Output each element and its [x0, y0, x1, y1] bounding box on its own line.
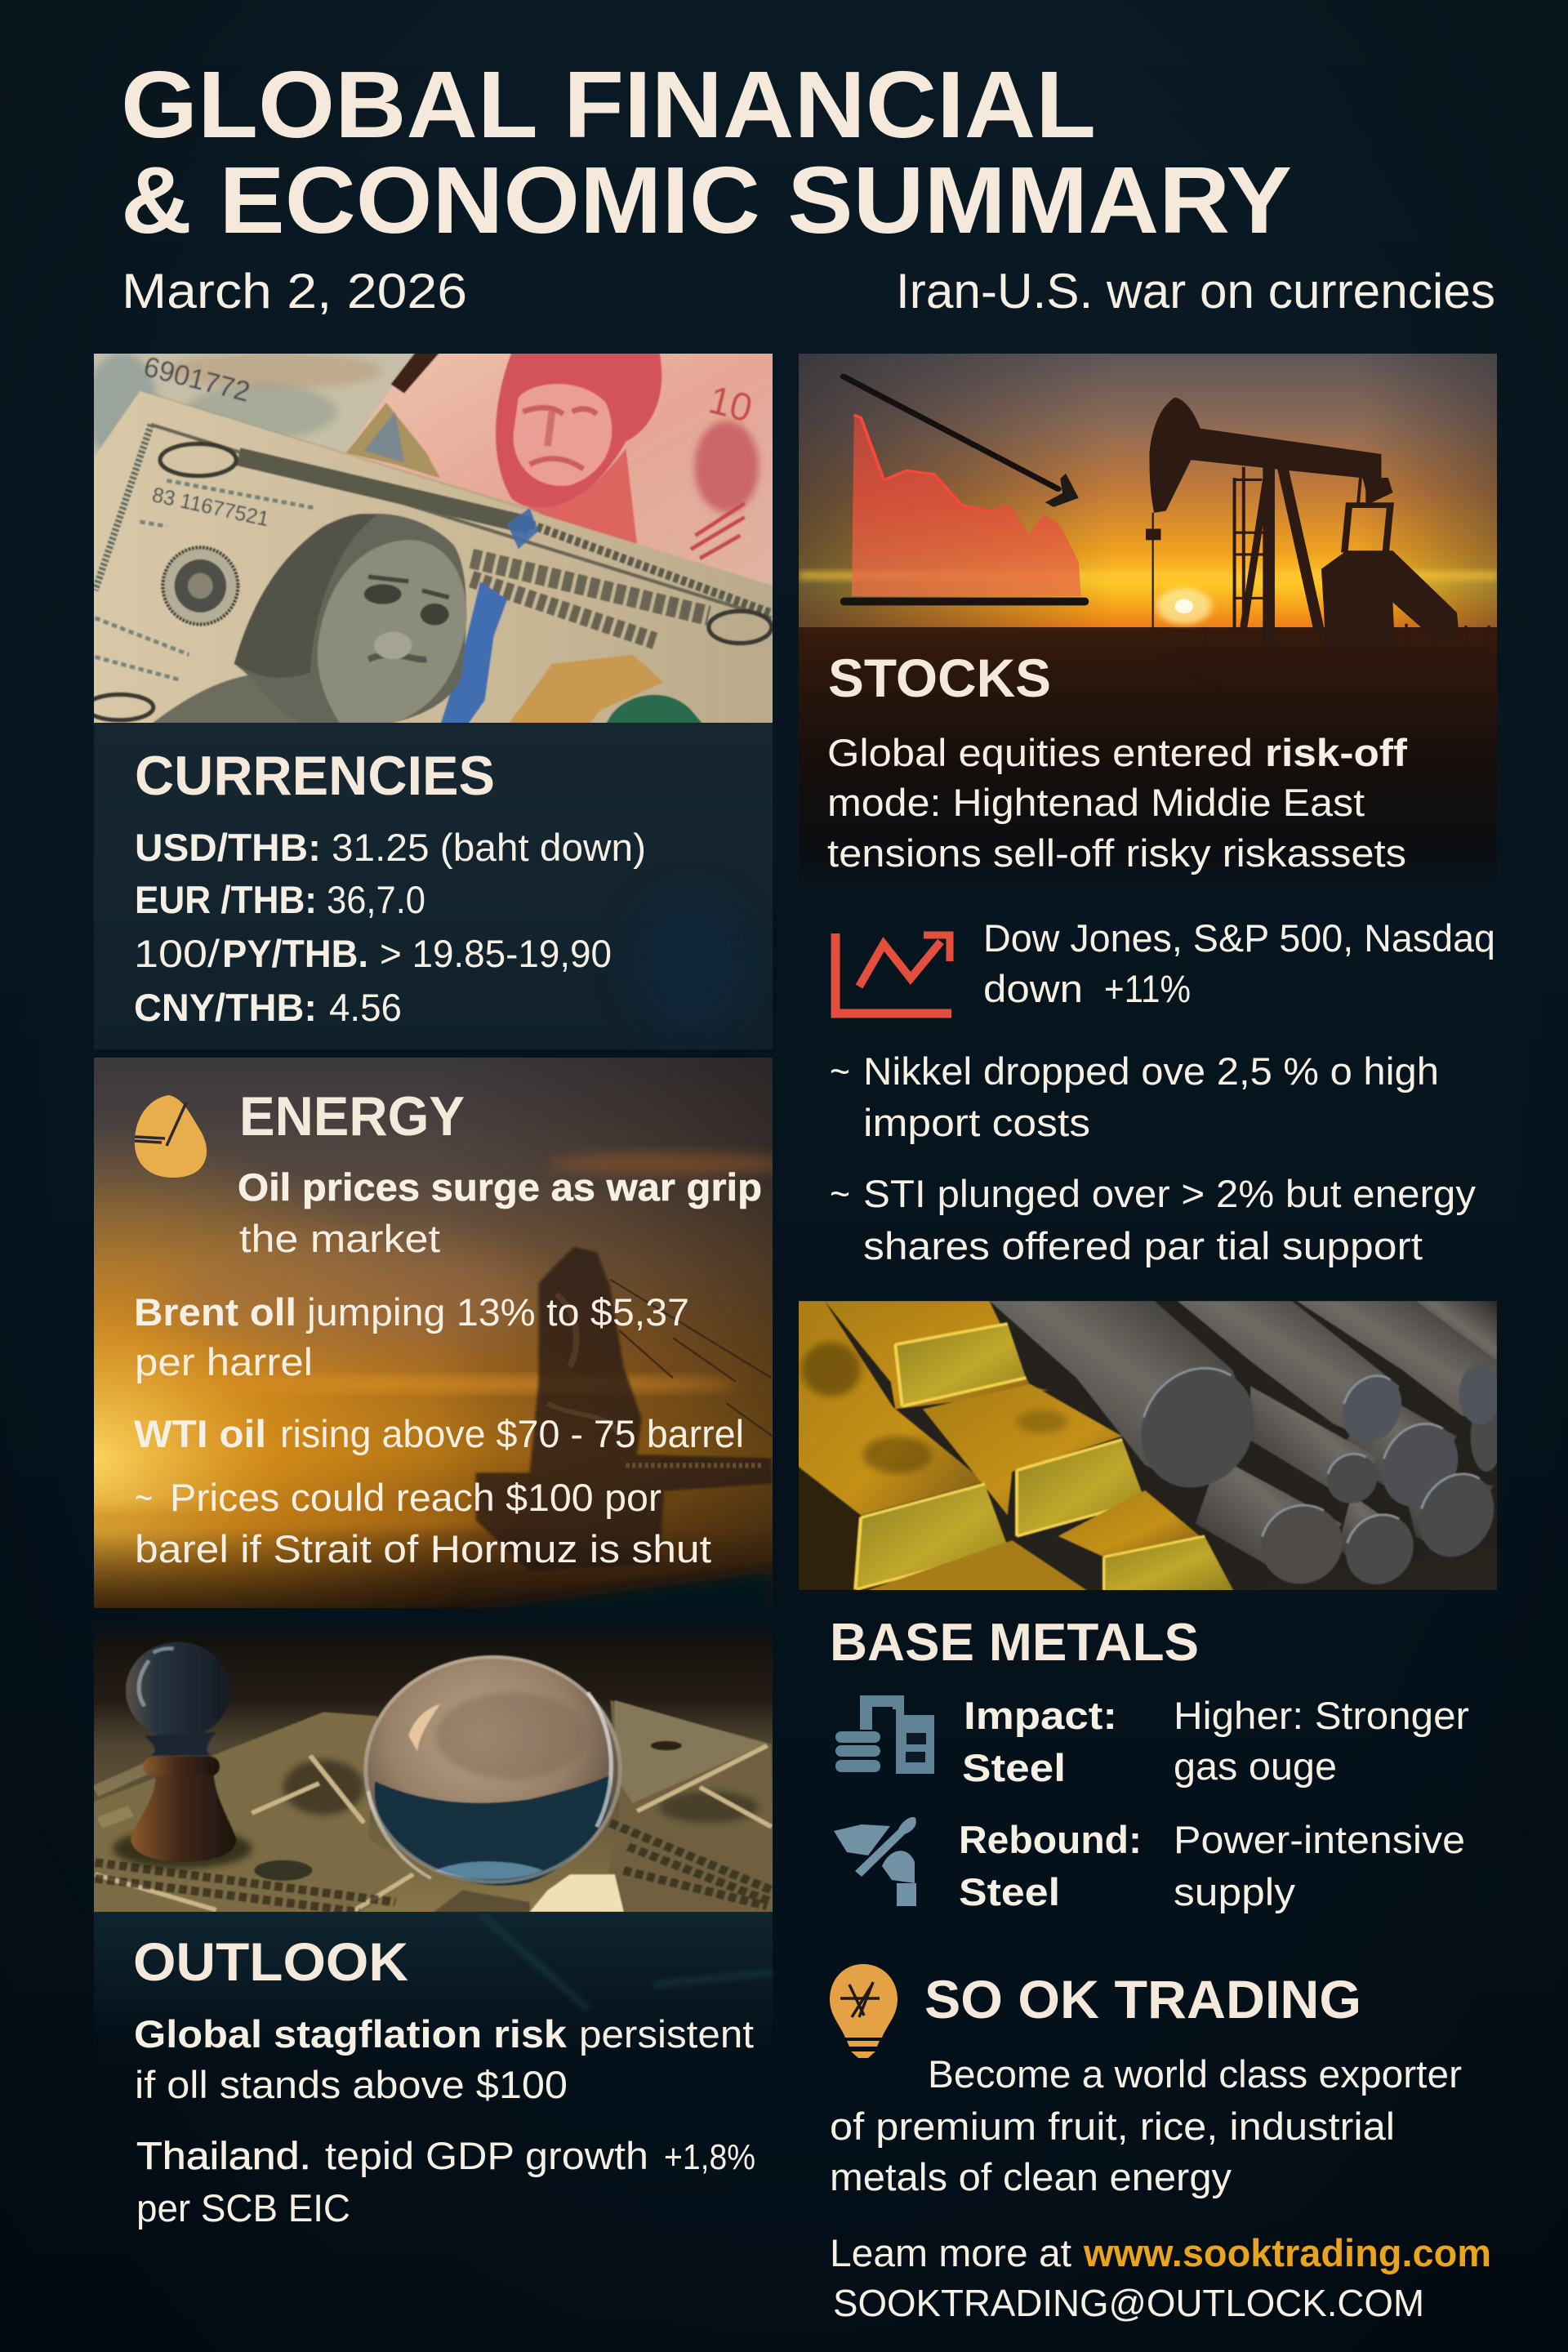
photo: banknotes [86, 351, 776, 726]
photo: pumpjack at sunset with falling chart [799, 354, 1498, 909]
icon: light bulb [830, 1964, 898, 2058]
mission text [830, 2052, 1462, 2198]
rate: CNY [134, 986, 402, 1029]
contact: website: www.sooktrading.com [1083, 2231, 1491, 2274]
heading: currencies: CURRENCIES [135, 745, 495, 807]
rate: CNY: CNY/THB: [134, 986, 317, 1029]
date: March 2, 2026 [122, 264, 467, 318]
photo: crystal ball and pawn [91, 1617, 776, 1914]
summary: oil prices: the market [239, 1217, 440, 1260]
summary: risk-off: mode: Hightenad Middie East [827, 781, 1365, 824]
mission text: of premium fruit, rice, industrial [830, 2105, 1395, 2148]
photo: sunset oil rig [94, 1058, 773, 1608]
contact: website: Leam more at [830, 2231, 1071, 2274]
item: Hormuz: ~ [135, 1476, 153, 1519]
item: impact: Impact: [964, 1694, 1117, 1737]
panel: stocks [799, 354, 1498, 1267]
summary: risk-off: tensions sell-off risky riskassets [827, 831, 1406, 875]
item: Thailand GDP: tepid GDP growth [325, 2134, 648, 2177]
item: Thailand GDP: Thailand. [136, 2134, 311, 2177]
item: Nikkei: Nikkel dropped ove 2,5 % o high [863, 1049, 1439, 1093]
item: brent: jumping 13% to $5,37 [305, 1290, 689, 1334]
rate: USD: USD/THB: [135, 826, 321, 869]
item: brent: Brent oll [134, 1290, 296, 1334]
item: US indexes: Dow Jones, S&P 500, Nasdaq [983, 916, 1495, 960]
photo: gold bars and steel rods [797, 1298, 1506, 1594]
subtitle: Iran-U.S. war on currencies [896, 264, 1495, 318]
photo: banknotes: 6901772 [140, 351, 253, 408]
title: GLOBAL FINANCIAL [121, 51, 1096, 158]
summary: risk-off: Global equities entered [827, 731, 1253, 774]
item: US indexes: down [983, 967, 1083, 1010]
item: stagflation: if oll stands above $100 [135, 2063, 568, 2106]
item: Hormuz [135, 1476, 711, 1570]
heading: outlook: OUTLOOK [133, 1931, 408, 1992]
heading: stocks: STOCKS [828, 648, 1051, 708]
title: & ECONOMIC SUMMARY [121, 147, 1292, 253]
mission text: Become a world class exporter [928, 2052, 1462, 2096]
item: rebound: Power-intensive [1174, 1818, 1465, 1861]
item: rebound: supply [1174, 1870, 1296, 1913]
rate: USD: 31.25 (baht down) [332, 826, 646, 869]
rate: USD [135, 826, 646, 869]
panel: base metals [797, 1298, 1506, 1913]
rate: EUR [135, 878, 425, 921]
item: WTI: WTI oil [134, 1412, 266, 1455]
item: Nikkei [830, 1049, 1439, 1144]
item: Hormuz: Prices could reach $100 por [170, 1476, 662, 1519]
heading: base metals: BASE METALS [830, 1612, 1199, 1672]
item: stagflation: Global stagflation risk [134, 2012, 568, 2056]
item: Thailand GDP: +1,8% [664, 2137, 755, 2177]
contact: website [830, 2231, 1491, 2274]
text panel: currencies [94, 723, 773, 1049]
summary: risk-off: risk-off [1265, 731, 1407, 774]
heading: so ok trading: SO OK TRADING [924, 1969, 1361, 2029]
item: US indexes [983, 916, 1495, 1010]
icon: oil drop [135, 1095, 207, 1178]
panel: so ok trading [830, 1964, 1491, 2324]
item: Nikkei: import costs [863, 1101, 1090, 1144]
rate: CNY: 4.56 [329, 986, 402, 1029]
item: rebound [959, 1818, 1465, 1913]
item: brent [134, 1290, 689, 1383]
summary: risk-off [827, 731, 1407, 875]
item: US indexes: +11% [1104, 967, 1191, 1010]
item: rebound: Rebound: [959, 1818, 1142, 1861]
item: STI: shares offered par tial support [863, 1224, 1423, 1267]
rate: EUR: EUR /THB: [135, 878, 317, 921]
item: brent: per harrel [135, 1340, 313, 1383]
item: stagflation: persistent [579, 2012, 754, 2056]
item: WTI: rising above $70 - 75 barrel [280, 1412, 744, 1455]
icon: tools [834, 1817, 916, 1906]
mission text: metals of clean energy [830, 2155, 1232, 2198]
item: STI [830, 1172, 1477, 1267]
item: stagflation [134, 2012, 754, 2106]
item: impact: Steel [962, 1746, 1066, 1789]
icon: steel coils and plant [835, 1695, 934, 1774]
rate: JPY: > 19.85-19,90 [380, 932, 612, 975]
rate: JPY [134, 932, 612, 975]
item: rebound: Steel [959, 1870, 1060, 1913]
title [121, 51, 1292, 253]
item: STI: ~ [830, 1172, 850, 1215]
item: Hormuz: barel if Strait of Hormuz is shut [135, 1527, 711, 1570]
icon: line chart [835, 933, 951, 1013]
contact: email: SOOKTRADING@OUTLOCK.COM [833, 2282, 1424, 2324]
heading: energy: ENERGY [239, 1085, 465, 1147]
text panel: outlook [94, 1912, 773, 2230]
rate: EUR: 36,7.0 [327, 878, 425, 921]
summary: oil prices [238, 1165, 762, 1260]
item: impact: gas ouge [1174, 1744, 1337, 1788]
item: Nikkei: ~ [830, 1049, 850, 1093]
photo: banknotes: 10 [705, 378, 756, 431]
item: impact [962, 1694, 1469, 1789]
rate: JPY: PY/THB. [222, 932, 368, 975]
item: STI: STI plunged over > 2% but energy [863, 1172, 1477, 1215]
item: Thailand GDP [136, 2134, 755, 2230]
rate: JPY: 100/ [134, 932, 220, 975]
panel: energy [94, 1058, 773, 1608]
photo: banknotes: 83 11677521 [150, 483, 271, 531]
item: Thailand GDP: per SCB EIC [136, 2186, 350, 2230]
panel: outlook [91, 1617, 776, 2230]
item: impact: Higher: Stronger [1174, 1694, 1469, 1737]
summary: oil prices: Oil prices surge as war grip [238, 1165, 762, 1209]
panel: currencies [86, 351, 776, 1049]
